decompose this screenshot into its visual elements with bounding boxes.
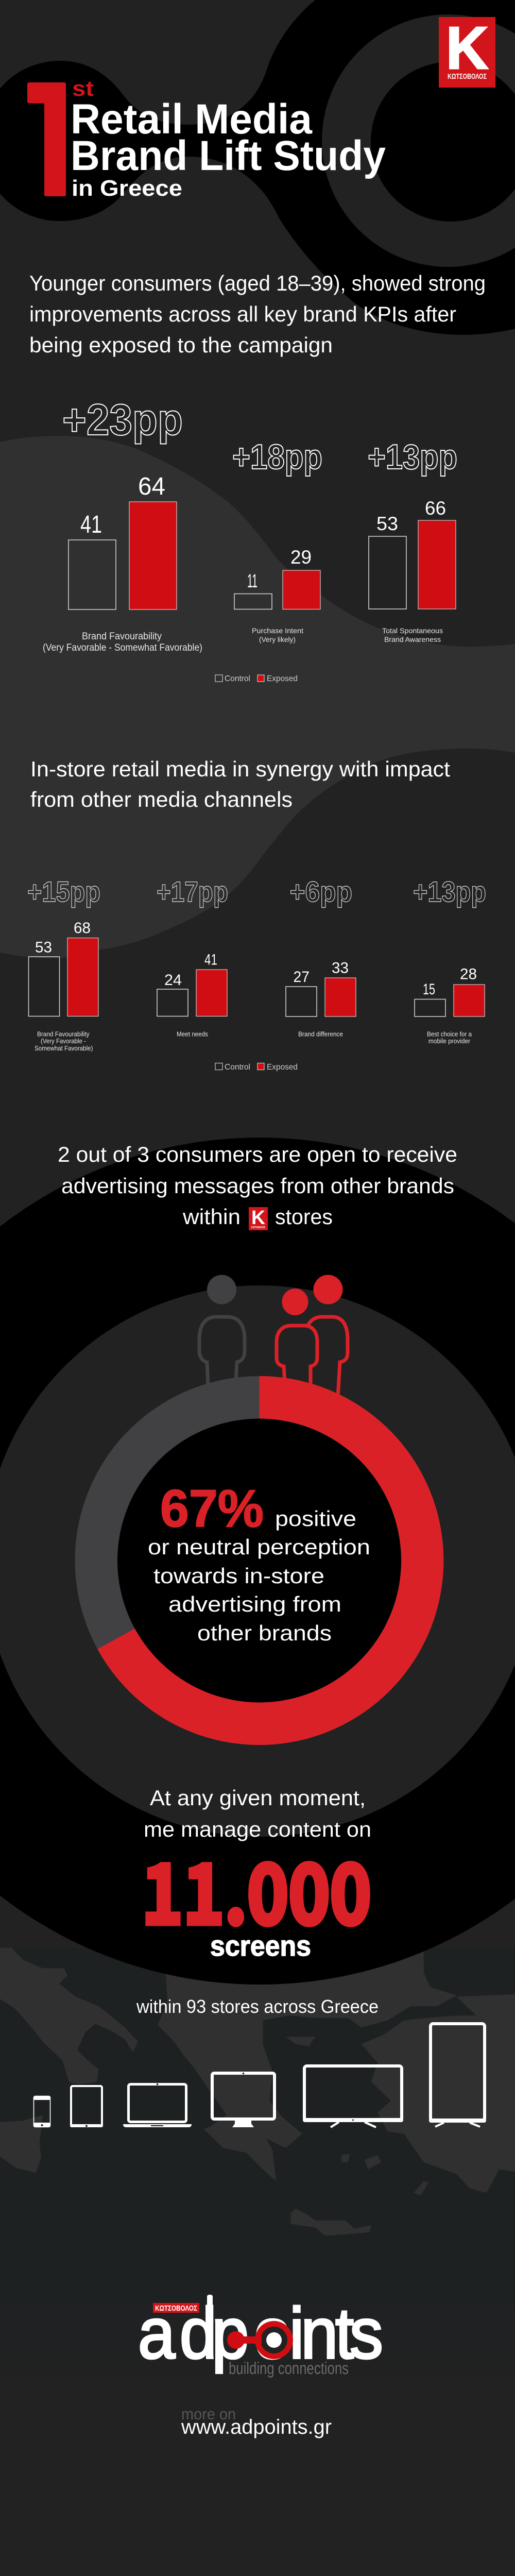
chart: brand favourability: Brand Favourability	[82, 631, 162, 642]
chart: purchase intent: 29	[290, 547, 312, 568]
chart: brand favourability: 41	[80, 511, 102, 538]
background: lighter grey wave	[0, 436, 515, 958]
text: within 93 stores: within 93 stores across Greece	[136, 1996, 379, 2017]
chart: brand difference: Brand difference	[298, 1030, 343, 1038]
callout: 67% positive perception: advertising from	[168, 1592, 341, 1616]
chart: meet needs: Meet needs	[177, 1030, 208, 1038]
logo: Kotsovolos	[439, 14, 495, 88]
text: more on www.adpoints.gr: www.adpoints.gr	[181, 2416, 332, 2438]
intro text	[29, 271, 486, 357]
logo: adpoints: adpoints	[138, 2293, 383, 2374]
stat: 11.000 screens: screens	[210, 1929, 311, 1962]
title: Brand Lift Study	[71, 132, 386, 179]
icon: tablet	[70, 2086, 103, 2127]
text: at any given moment: At any given moment,	[150, 1786, 366, 1810]
heading: 2 out of 3 consumers: 2 out of 3 consumers are open to receive	[58, 1142, 457, 1166]
title: 1	[15, 8, 111, 243]
chart: brand favourability	[43, 396, 202, 653]
chart: brand favourability: 64	[138, 473, 165, 500]
chart: brand favourability, synergy: Brand Favourability	[37, 1030, 90, 1038]
legend: first chart: Exposed	[267, 674, 298, 683]
callout: 67% positive perception: or neutral perception	[148, 1535, 370, 1559]
background: dark inner circle	[0, 1285, 515, 1837]
intro text: improvements across all key brand KPIs after	[29, 302, 456, 326]
logo: Kotsovolos: ΚΩΤΣΟΒΟΛΟΣ	[448, 72, 487, 81]
callout: 67% positive perception: other brands	[197, 1621, 332, 1645]
icon: monitor	[212, 2073, 274, 2127]
chart: brand favourability, synergy: Somewhat Favorable)	[35, 1044, 93, 1052]
chart: purchase intent	[232, 437, 322, 643]
icon: phone	[33, 2096, 50, 2127]
callout: 67% positive perception: towards in-store	[153, 1564, 324, 1588]
legend: first chart	[215, 674, 298, 683]
background: large black circle	[0, 1138, 515, 1985]
logo: adpoints: building connections	[229, 2359, 349, 2378]
title	[27, 81, 386, 196]
logo: adpoints: ΚΩΤΣΟΒΟΛΟΣ	[155, 2304, 197, 2313]
chart: best choice for a mobile provider: +13pp	[413, 875, 486, 908]
icon: laptop	[123, 2083, 192, 2127]
legend: second chart: Exposed	[267, 1063, 298, 1072]
chart: brand favourability, synergy	[27, 875, 100, 1052]
heading: in-store retail media: from other media channels	[30, 787, 293, 811]
chart: meet needs: 41	[204, 951, 217, 969]
chart: purchase intent: 11	[247, 570, 258, 591]
chart: brand favourability, synergy: 68	[74, 920, 91, 937]
text: at any given moment: me manage content on	[144, 1817, 371, 1841]
legend: first chart: Control	[225, 674, 250, 683]
chart: brand favourability, synergy: (Very Favorable -	[41, 1037, 86, 1045]
icons: screens of increasing size	[33, 2024, 486, 2127]
chart: total spontaneous brand awareness: 53	[376, 513, 398, 534]
heading: 2 out of 3 consumers: ΚΩΤΣΟΒΟΛΟΣ	[251, 1226, 265, 1229]
chart: meet needs: +17pp	[157, 875, 228, 908]
legend: second chart	[215, 1063, 298, 1072]
chart: total spontaneous brand awareness: 66	[425, 498, 446, 519]
chart: best choice for a mobile provider: Best choice for a	[427, 1030, 472, 1038]
icon: television	[303, 2066, 403, 2127]
chart: brand difference: +6pp	[289, 875, 352, 908]
title: in Greece	[72, 176, 182, 201]
intro text: being exposed to the campaign	[29, 333, 333, 357]
text: more on www.adpoints.gr: more on	[181, 2405, 236, 2423]
heading: 2 out of 3 consumers: within	[182, 1205, 241, 1229]
chart: brand favourability: +23pp	[62, 396, 183, 445]
heading: 2 out of 3 consumers: advertising messages from other brands	[61, 1174, 454, 1198]
stat: 11.000 screens: 11.000	[142, 1828, 371, 1948]
chart: purchase intent: (Very likely)	[259, 635, 296, 643]
chart: total spontaneous brand awareness: Brand Awareness	[384, 635, 441, 643]
text: at any given moment	[144, 1786, 371, 1841]
chart: purchase intent: Purchase Intent	[252, 626, 303, 635]
intro text: Younger consumers (aged 18–39), showed strong	[29, 271, 486, 295]
icon: red persons	[277, 1275, 348, 1397]
chart: total spontaneous brand awareness: +13pp	[368, 437, 457, 477]
background: map of Greece region	[0, 1947, 515, 2375]
donut chart: 67%	[75, 1376, 444, 1745]
chart: brand favourability: (Very Favorable - Somewhat Favorable)	[43, 642, 202, 653]
text: more on www.adpoints.gr	[181, 2405, 332, 2438]
callout: 67% positive perception: positive	[275, 1506, 356, 1531]
icon: grey person	[199, 1275, 245, 1386]
callout: 67% positive perception: 67%	[160, 1479, 264, 1538]
chart: total spontaneous brand awareness	[368, 437, 457, 643]
chart: brand difference: 27	[294, 969, 310, 986]
heading: 2 out of 3 consumers	[58, 1142, 457, 1230]
heading: 2 out of 3 consumers: K	[251, 1207, 266, 1229]
chart: best choice for a mobile provider: mobile provider	[428, 1037, 471, 1045]
background: top black blob and ring	[0, 0, 515, 335]
chart: brand favourability, synergy: +15pp	[27, 875, 100, 908]
chart: meet needs	[157, 875, 228, 1038]
heading: 2 out of 3 consumers: stores	[275, 1205, 333, 1229]
heading: in-store retail media	[30, 757, 450, 811]
chart: brand favourability, synergy: 53	[35, 939, 52, 956]
chart: best choice for a mobile provider: 28	[460, 965, 477, 983]
callout: 67% positive perception	[148, 1479, 370, 1645]
chart: brand difference: 33	[332, 959, 349, 977]
chart: total spontaneous brand awareness: Total Spontaneous	[382, 626, 443, 635]
chart: brand difference	[286, 875, 356, 1038]
title: Retail Media	[71, 96, 313, 143]
heading: in-store retail media: In-store retail media in synergy with impact	[30, 757, 450, 781]
title: st	[72, 76, 94, 100]
chart: best choice for a mobile provider	[413, 875, 486, 1045]
chart: purchase intent: +18pp	[232, 437, 322, 477]
legend: second chart: Control	[225, 1063, 250, 1072]
chart: meet needs: 24	[164, 972, 182, 989]
logo: Kotsovolos: K	[446, 14, 488, 81]
chart: best choice for a mobile provider: 15	[423, 981, 435, 998]
icon: vertical display	[429, 2024, 486, 2127]
